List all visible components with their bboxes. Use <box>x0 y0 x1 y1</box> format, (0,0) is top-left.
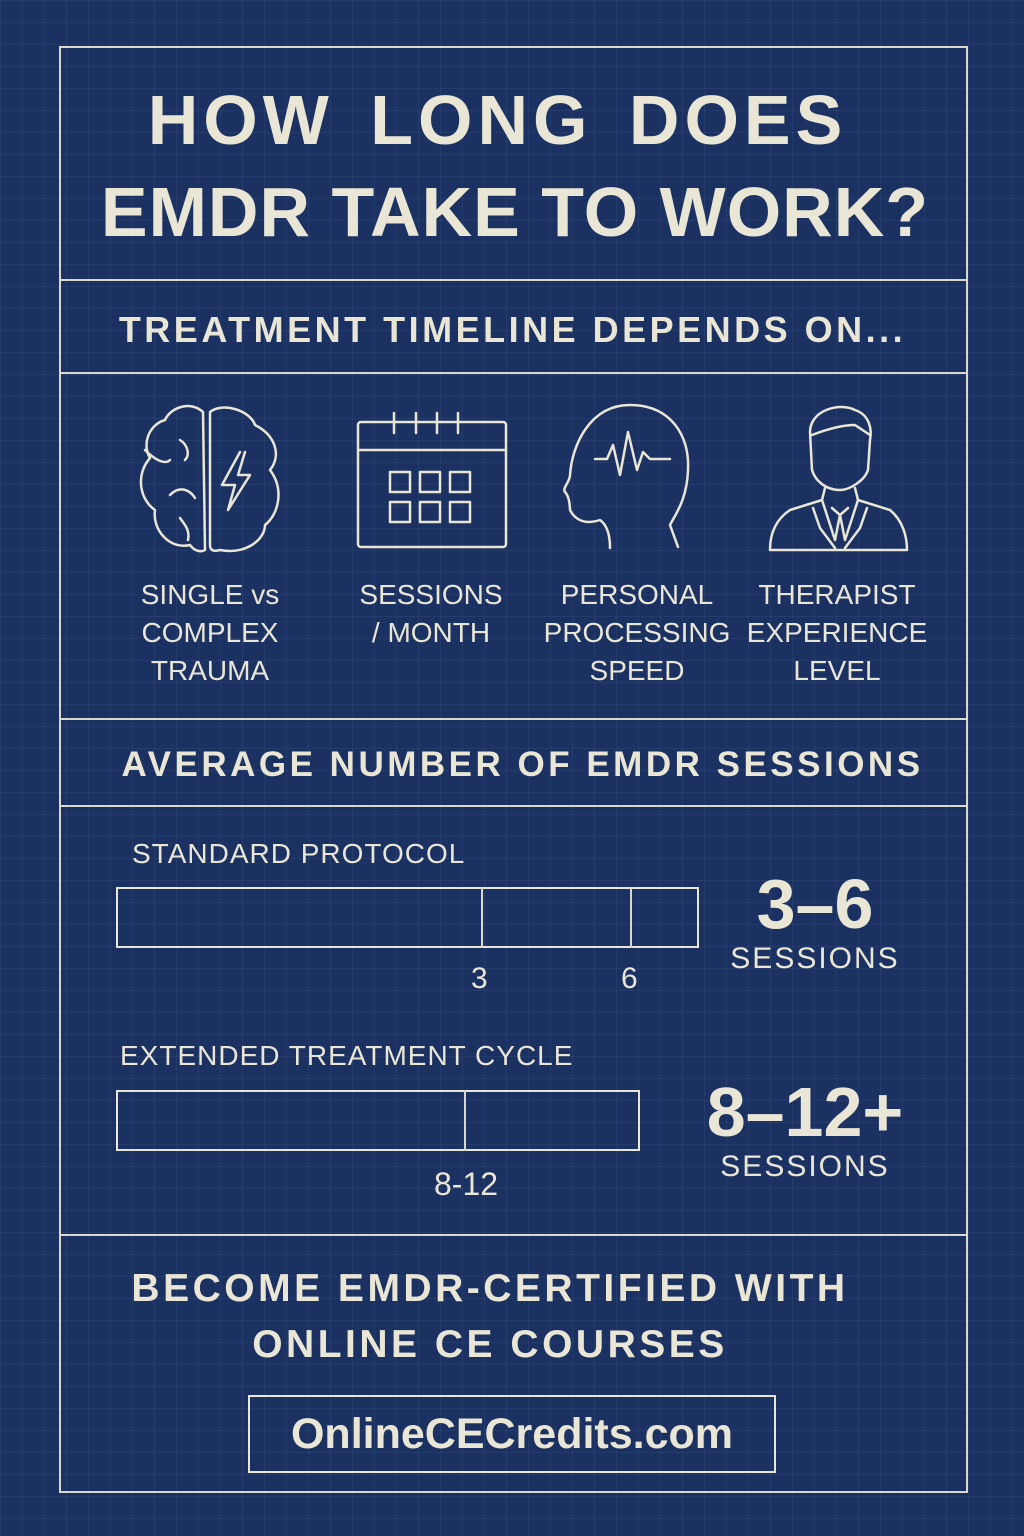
subheading: average sessions: AVERAGE NUMBER OF EMDR SESSIONS <box>121 745 924 784</box>
standard protocol bar <box>116 838 699 995</box>
extended cycle bar <box>116 1040 640 1202</box>
title <box>101 81 929 251</box>
value: 3-6 sessions: 3–6 <box>757 865 873 943</box>
text: PERSONAL <box>561 579 713 610</box>
subheading: timeline depends on: TREATMENT TIMELINE DEPENDS ON... <box>119 309 906 350</box>
extended cycle bar: 8-12 <box>434 1166 498 1202</box>
text: PROCESSING <box>544 617 730 648</box>
value: 8-12+ sessions: 8–12+ <box>707 1073 903 1151</box>
value: 3-6 sessions: SESSIONS <box>730 942 900 975</box>
icons row <box>140 404 908 552</box>
title: HOW LONG DOES <box>148 81 847 159</box>
standard protocol bar: 3 <box>471 962 488 995</box>
text: SPEED <box>590 655 684 686</box>
extended cycle bar: EXTENDED TREATMENT CYCLE <box>120 1040 573 1071</box>
call to action <box>131 1267 849 1366</box>
text: EXPERIENCE <box>747 617 927 648</box>
text: LEVEL <box>793 655 881 686</box>
standard protocol bar: STANDARD PROTOCOL <box>132 838 465 869</box>
text: THERAPIST <box>758 579 916 610</box>
value: 3-6 sessions <box>730 865 900 975</box>
icon: brain <box>141 406 278 551</box>
icon: calendar <box>358 413 506 547</box>
website button: OnlineCECredits.com <box>291 1410 733 1458</box>
website button <box>248 1395 776 1473</box>
text: / MONTH <box>372 617 490 648</box>
title: EMDR TAKE TO WORK? <box>101 173 929 251</box>
icon: head with pulse <box>564 405 688 548</box>
value: 8-12+ sessions: SESSIONS <box>720 1150 890 1183</box>
text: SESSIONS <box>359 579 503 610</box>
call to action: ONLINE CE COURSES <box>252 1323 728 1366</box>
standard protocol bar: 6 <box>621 962 638 995</box>
call to action: BECOME EMDR-CERTIFIED WITH <box>131 1267 849 1310</box>
icon: therapist <box>770 407 907 550</box>
factor labels <box>141 579 279 686</box>
factor labels: TRAUMA <box>151 655 269 686</box>
factor labels: SINGLE vs <box>141 579 279 610</box>
factor labels: COMPLEX <box>142 617 278 648</box>
